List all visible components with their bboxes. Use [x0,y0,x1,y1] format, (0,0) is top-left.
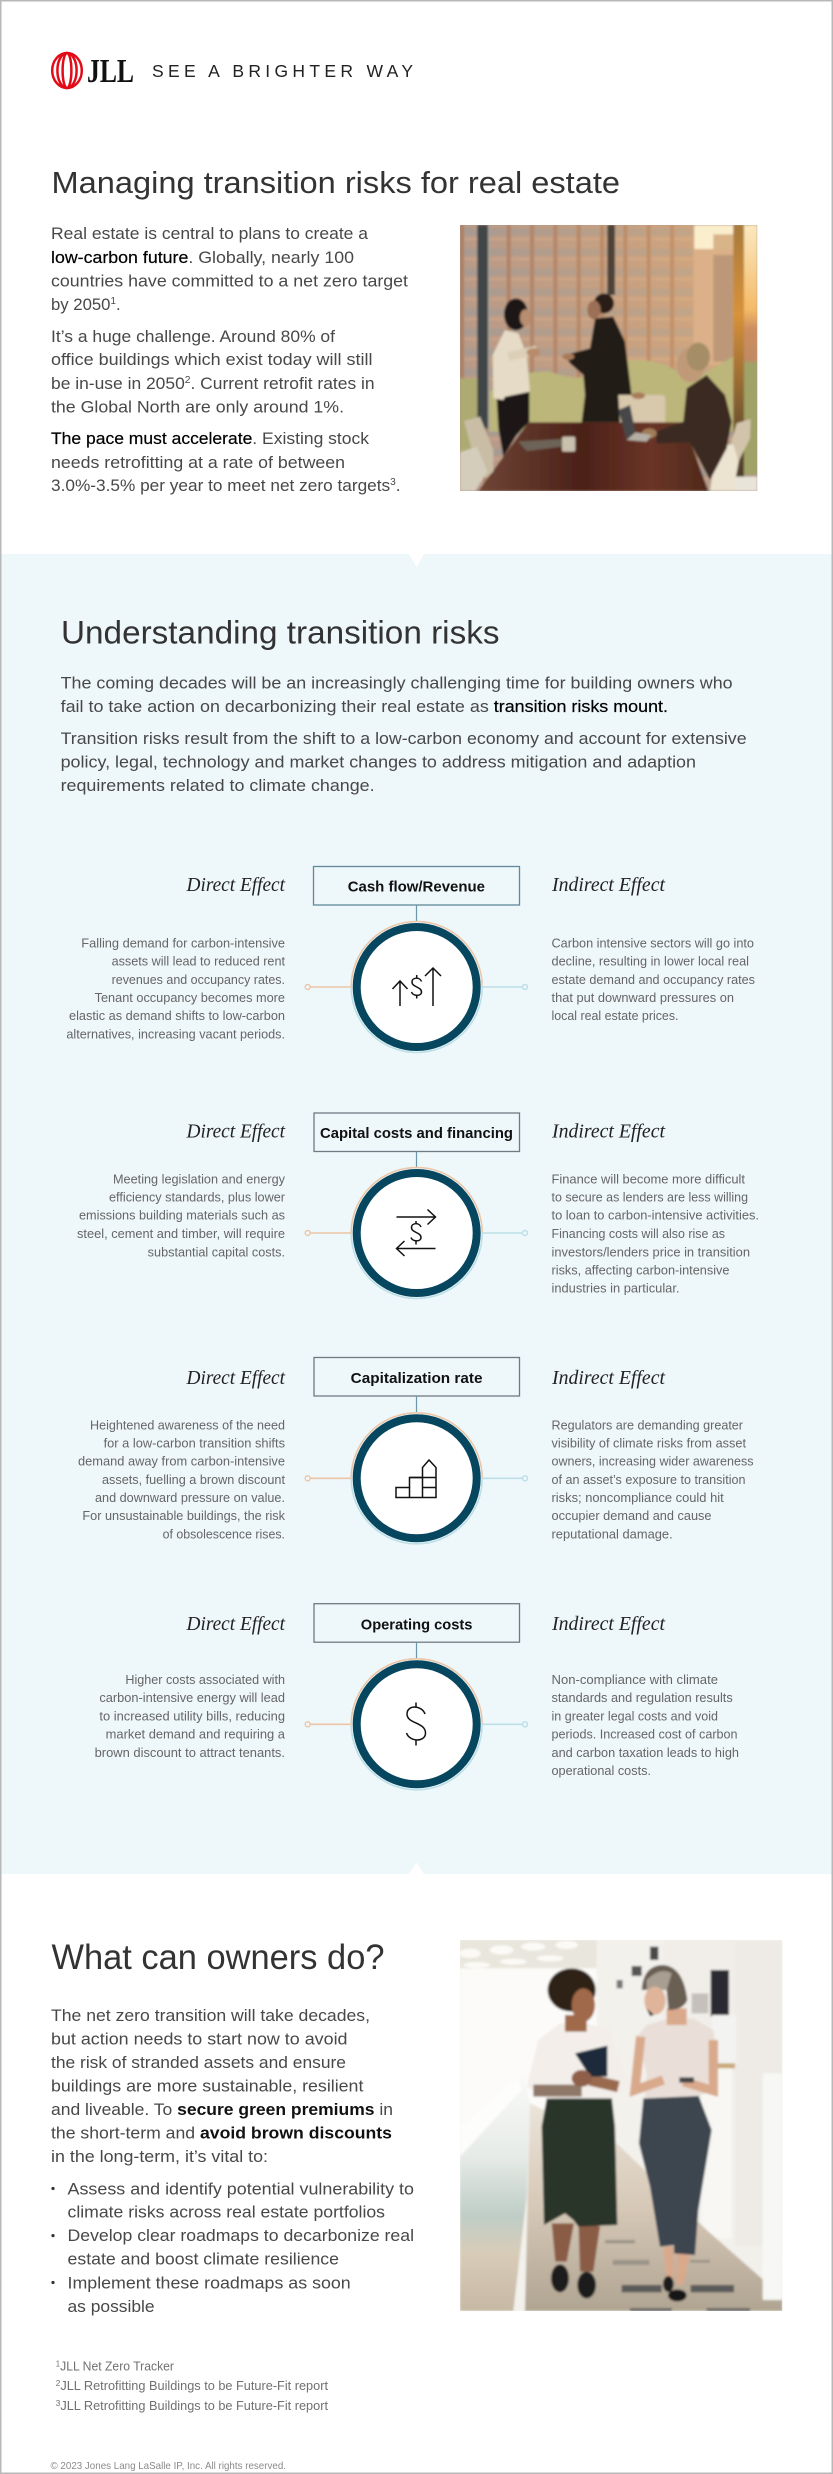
photo: two women walking [459,1940,782,2311]
title: Managing transition risks for real estate [52,165,620,200]
icon: exchange arrows with dollar [396,1210,436,1256]
indirect effect text: Financing costs will also rise as [552,1227,725,1241]
bullet list: estate and boost climate resilience [68,2250,339,2269]
intro text block: by 2050 [51,295,112,314]
direct effect text [77,1172,286,1259]
text block: buildings are more sustainable, resilient [51,2076,364,2095]
direct effect text: to increased utility bills, reducing [99,1709,285,1723]
indirect effect text: risks; noncompliance could hit [552,1491,724,1505]
direct effect text: substantial capital costs. [148,1245,285,1259]
box: cash flow/revenue: Cash flow/Revenue [348,878,485,896]
intro text block: 1 [110,296,116,307]
cup and book [562,437,575,452]
bullet list: Assess and identify potential vulnerability to [68,2179,414,2198]
footnotes: JLL Retrofitting Buildings to be Future-Fit report [60,2399,329,2413]
direct effect text [66,936,286,1042]
indirect effect text: to secure as lenders are less willing [552,1191,748,1205]
intro text block: Real estate is central to plans to create a [51,224,369,243]
indirect effect text: to loan to carbon-intensive activities. [552,1209,759,1223]
box: operating costs: Operating costs [361,1616,472,1633]
row: operating costs [95,1604,739,1790]
direct effect text: revenues and occupancy rates. [112,973,285,987]
text block [51,2006,393,2166]
bullet list: Develop clear roadmaps to decarbonize real [68,2226,414,2245]
text block: the short-term and avoid brown discounts [51,2124,392,2143]
indirect effect text: owners, increasing wider awareness [552,1455,754,1469]
section intro text: policy, legal, technology and market changes to address mitigation and adaption [61,752,696,772]
direct effect text: elastic as demand shifts to low-carbon [69,1009,285,1023]
footnotes [56,2359,329,2413]
label: direct effect: Direct Effect [186,1614,286,1635]
indirect effect text: Carbon intensive sectors will go into [552,936,754,950]
indirect effect text: operational costs. [552,1764,651,1778]
direct effect text: alternatives, increasing vacant periods. [66,1028,285,1042]
photo: boardroom meeting [460,225,757,491]
section intro text: fail to take action on decarbonizing their real estate as transition risks mount. [61,697,668,716]
intro text block: . [396,476,401,495]
box: cash flow/revenue [314,866,520,905]
box: capitalization rate: Capitalization rate [351,1370,482,1387]
direct effect text: assets will lead to reduced rent [112,955,286,969]
text block: but action needs to start now to avoid [51,2030,348,2049]
table [478,422,708,491]
box: operating costs [314,1604,520,1642]
footnotes: 1 [56,2359,61,2368]
indirect effect text: that put downward pressures on [552,991,734,1005]
panel: header logo [52,53,413,90]
connector and circle [305,1152,528,1298]
direct effect text: assets, fuelling a brown discount [102,1473,286,1487]
direct effect text: emissions building materials such as [79,1209,285,1223]
bullet list [51,2179,414,2316]
footnotes: 3 [56,2399,61,2408]
direct effect text: For unsustainable buildings, the risk [82,1509,286,1523]
indirect effect text: Regulators are demanding greater [552,1418,743,1432]
indirect effect text: Non-compliance with climate [552,1673,718,1687]
tagline: SEE A BRIGHTER WAY [152,61,413,81]
icon: JLL ring logo [52,53,82,88]
label: indirect effect: Indirect Effect [551,1122,666,1143]
connector and circle [305,1396,528,1544]
woman one [552,2223,574,2262]
intro text block: . Current retrofit rates in [190,374,375,393]
indirect effect text: Finance will become more difficult [552,1172,746,1186]
row: capital costs and financing [77,1113,759,1298]
direct effect text: Falling demand for carbon-intensive [81,936,285,950]
intro text block: . [116,295,121,314]
direct effect text: of obsolescence rises. [163,1528,285,1542]
direct effect text: Meeting legislation and energy [113,1172,286,1186]
direct effect text: market demand and requiring a [106,1728,285,1742]
direct effect text: steel, cement and timber, will require [77,1227,285,1241]
intro text block: office buildings which exist today will still [51,350,372,369]
label: direct effect: Direct Effect [186,1122,286,1143]
intro text block: the Global North are only around 1%. [51,398,344,416]
intro text block: low-carbon future . Globally, nearly 100 [51,248,354,267]
indirect effect text: reputational damage. [552,1528,673,1542]
direct effect text [78,1418,286,1542]
indirect effect text: investors/lenders price in transition [552,1245,750,1259]
intro text block: 3 [390,477,396,488]
direct effect text: brown discount to attract tenants. [95,1746,285,1760]
direct effect text: Higher costs associated with [125,1673,285,1687]
row: capitalization rate [78,1358,754,1544]
indirect effect text: of an asset’s exposure to transition [552,1473,746,1487]
text block: in the long-term, it’s vital to: [51,2147,268,2166]
panel: what can owners do [50,1938,782,2472]
connector and circle [305,1642,528,1790]
box: capital costs and financing: Capital costs and financing [320,1125,513,1142]
indirect effect text: risks, affecting carbon-intensive [552,1264,730,1278]
bullet list: climate risks across real estate portfolios [68,2203,385,2222]
chairs left [464,417,493,478]
direct effect text: Heightened awareness of the need [90,1418,285,1432]
indirect effect text: periods. Increased cost of carbon [552,1728,738,1742]
icon: dollar with up arrows [392,968,441,1006]
intro text block: 3.0%-3.5% per year to meet net zero targets [51,476,386,495]
chairs right [730,418,752,462]
bullet list: as possible [68,2297,155,2316]
label: direct effect: Direct Effect [186,1368,286,1389]
heading: Understanding transition risks [61,614,500,650]
panel: intro [51,165,757,495]
row: cash flow / revenue [66,866,755,1052]
label: indirect effect: Indirect Effect [551,875,666,896]
bullet list: Implement these roadmaps as soon [68,2273,351,2292]
direct effect text: Tenant occupancy becomes more [95,991,285,1005]
indirect effect text [552,1418,754,1542]
direct effect text [95,1673,285,1760]
label: indirect effect: Indirect Effect [551,1614,666,1635]
icon: rising building blocks [396,1460,436,1498]
label: indirect effect: Indirect Effect [551,1368,666,1389]
indirect effect text: and carbon taxation leads to high [552,1746,739,1760]
section intro text: The coming decades will be an increasingly challenging time for building owners who [61,674,733,692]
section intro text [61,674,747,795]
text block: and liveable. To secure green premiums in [51,2100,393,2119]
direct effect text: for a low-carbon transition shifts [104,1436,285,1450]
heading: What can owners do? [52,1938,384,1977]
logo wordmark: JLL [87,53,134,90]
intro text block: needs retrofitting at a rate of between [51,453,345,472]
indirect effect text: in greater legal costs and void [552,1709,718,1723]
section intro text: requirements related to climate change. [61,776,375,795]
panel: understanding transition risks [0,554,833,1874]
box: capitalization rate [314,1358,520,1396]
intro text block: 2 [185,375,191,386]
label: direct effect: Direct Effect [186,875,286,896]
footnotes: JLL Retrofitting Buildings to be Future-Fit report [60,2379,329,2393]
copyright: © 2023 Jones Lang LaSalle IP, Inc. All rights reserved. [50,2460,286,2472]
woman middle [565,317,632,422]
direct effect text: carbon-intensive energy will lead [99,1691,285,1705]
woman left [497,392,529,457]
indirect effect text: local real estate prices. [552,1009,678,1023]
indirect effect text [552,1172,759,1296]
man [656,375,732,480]
footnotes: JLL Net Zero Tracker [60,2359,174,2373]
text block: the risk of stranded assets and ensure [51,2053,346,2072]
intro text block: countries have committed to a net zero target [51,272,408,290]
text block: The net zero transition will take decades, [51,2006,370,2025]
icon: dollar [406,1702,426,1746]
intro text block: It’s a huge challenge. Around 80% of [51,327,335,346]
indirect effect text: estate demand and occupancy rates [552,973,755,987]
intro text block: be in-use in 2050 [51,374,181,393]
indirect effect text: industries in particular. [552,1282,680,1296]
panel background [0,554,833,1874]
direct effect text: demand away from carbon-intensive [78,1455,285,1469]
direct effect text: and downward pressure on value. [95,1491,285,1505]
indirect effect text: standards and regulation results [552,1691,733,1705]
section intro text: Transition risks result from the shift to a low-carbon economy and account for extensive [61,729,747,748]
indirect effect text: decline, resulting in lower local real [552,955,749,969]
connector and circle [305,905,528,1052]
intro text block [51,224,408,495]
direct effect text: efficiency standards, plus lower [109,1191,285,1205]
laptop [618,405,635,440]
indirect effect text: occupier demand and cause [552,1509,712,1523]
woman two [663,2247,674,2278]
indirect effect text [552,936,755,1023]
indirect effect text: visibility of climate risks from asset [552,1436,747,1450]
box: capital costs and financing [314,1113,520,1152]
footnotes: 2 [56,2379,61,2388]
indirect effect text [552,1673,739,1778]
intro text block: The pace must accelerate . Existing stock [51,429,370,448]
